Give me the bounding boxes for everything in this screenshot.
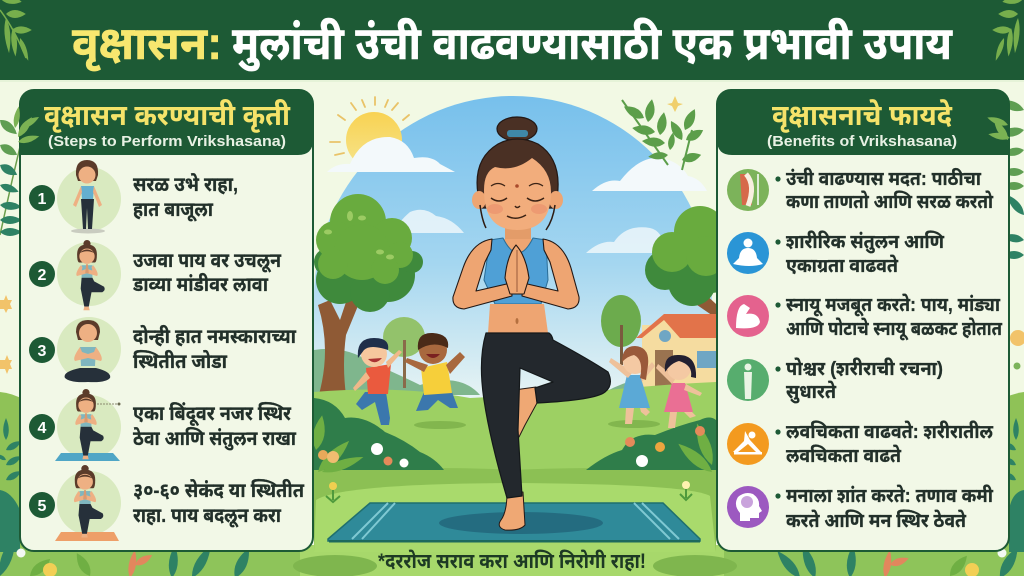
step 2: डाव्या मांडीवर लावा [132,272,269,296]
frame leaves: left [0,105,30,552]
house [636,314,716,390]
panel header: benefits: वृक्षासनाचे फायदे [772,98,953,133]
benefit: calm mind: करते आणि मन स्थिर ठेवते [786,509,967,532]
benefit: flexibility [727,420,994,467]
right tree [645,206,730,318]
step 5: ३०-६० सेकंद या स्थितीत [133,478,305,502]
step 2: 2 [38,267,47,284]
kid: pink dress girl [656,355,702,428]
title text: वृक्षासन: [72,17,222,72]
step 5: 5 [38,498,47,515]
benefit: posture: पोश्चर (शरीराची रचना) [786,358,943,380]
left bush [310,398,444,477]
scene: park illustration [310,96,730,552]
step 4: 4 [38,420,47,437]
benefit: muscles: स्नायू मजबूत करते: पाय, मांड्या [786,293,1000,317]
tank top [484,238,548,304]
step 3 [29,317,297,382]
step 1: 1 [38,191,47,208]
benefit: height: कणा ताणतो आणि सरळ करतो [786,191,993,213]
step 1: हात बाजूला [133,199,214,222]
small flowers [326,481,692,502]
eyes and smile [491,198,544,218]
step 1 [29,160,238,234]
chest [494,239,542,282]
step 4: ठेवा आणि संतुलन राखा [133,426,297,451]
step 5 [29,465,305,541]
benefit: posture [727,358,943,404]
benefit: flexibility: लवचिकता वाढवते: शरीरातील [786,420,994,443]
sky dome [314,96,712,400]
small trees [383,295,641,388]
step 2: उजवा पाय वर उचलून [133,250,282,273]
lawn [314,382,716,552]
step 1: सरळ उभे राहा, [133,172,238,196]
panel header: steps [20,90,313,155]
right bush [586,418,717,476]
bent foot [514,387,537,437]
banner leaves [0,0,1024,62]
step 2 [29,240,282,310]
hair [477,139,558,208]
arms [453,239,512,309]
bottom foliage [0,533,1022,576]
kid: blue dress girl [609,346,655,424]
standing foot [499,492,525,530]
benefit: muscles [727,293,1003,341]
panel header: benefits [717,90,1009,155]
hair strands [480,205,555,230]
step 5: राहा. पाय बदलून करा [133,505,282,528]
panel header: steps: वृक्षासन करण्याची कृती [44,99,290,133]
title text: मुलांची उंची वाढवण्यासाठी एक प्रभावी उपाय [232,17,953,71]
namaste hands [505,245,529,294]
sprig over benefits panel header [986,114,1011,142]
sun [330,97,409,168]
leggings [481,333,610,498]
kid: yellow shirt boy [405,333,465,411]
step 3: 3 [38,343,47,360]
kid: red shirt boy [353,338,402,425]
step 4: एका बिंदूवर नजर स्थिर [133,401,292,426]
benefit: balance: शारीरिक संतुलन आणि [786,231,945,254]
neck [505,225,531,247]
midriff [488,304,548,333]
left tree [314,194,423,398]
benefit: height: उंची वाढण्यास मदत: पाठीचा [786,167,981,190]
benefit: calm mind [727,484,993,532]
yoga mat [328,503,700,542]
benefit: balance [727,231,945,277]
title banner [0,0,1024,82]
benefit: flexibility: लवचिकता वाढते [786,444,902,467]
panel: steps [20,90,313,551]
benefit: balance: एकाग्रता वाढवते [786,254,899,277]
ears [472,191,486,209]
step 3: स्थितीत जोडा [133,349,228,373]
panel header: steps: (Steps to Perform Vrikshasana) [48,133,286,150]
face [484,158,551,230]
clouds [327,137,707,253]
frame leaves: right [997,97,1024,552]
step 3: दोन्ही हात नमस्काराच्या [133,324,297,348]
panel: benefits [717,90,1009,551]
benefit: posture: सुधारते [786,380,837,404]
footer note: *दररोज सराव करा आणि निरोगी राहा! [378,549,646,573]
sprig top right [622,96,705,170]
hair bun [497,117,537,141]
background hills [314,349,480,395]
panel header: benefits: (Benefits of Vrikshasana) [767,133,957,150]
girl in tree pose [453,117,610,530]
step 4 [29,389,297,461]
benefit: calm mind: मनाला शांत करते: तणाव कमी [786,484,993,507]
sprig over steps panel header [12,106,41,145]
benefit: height [727,167,993,213]
